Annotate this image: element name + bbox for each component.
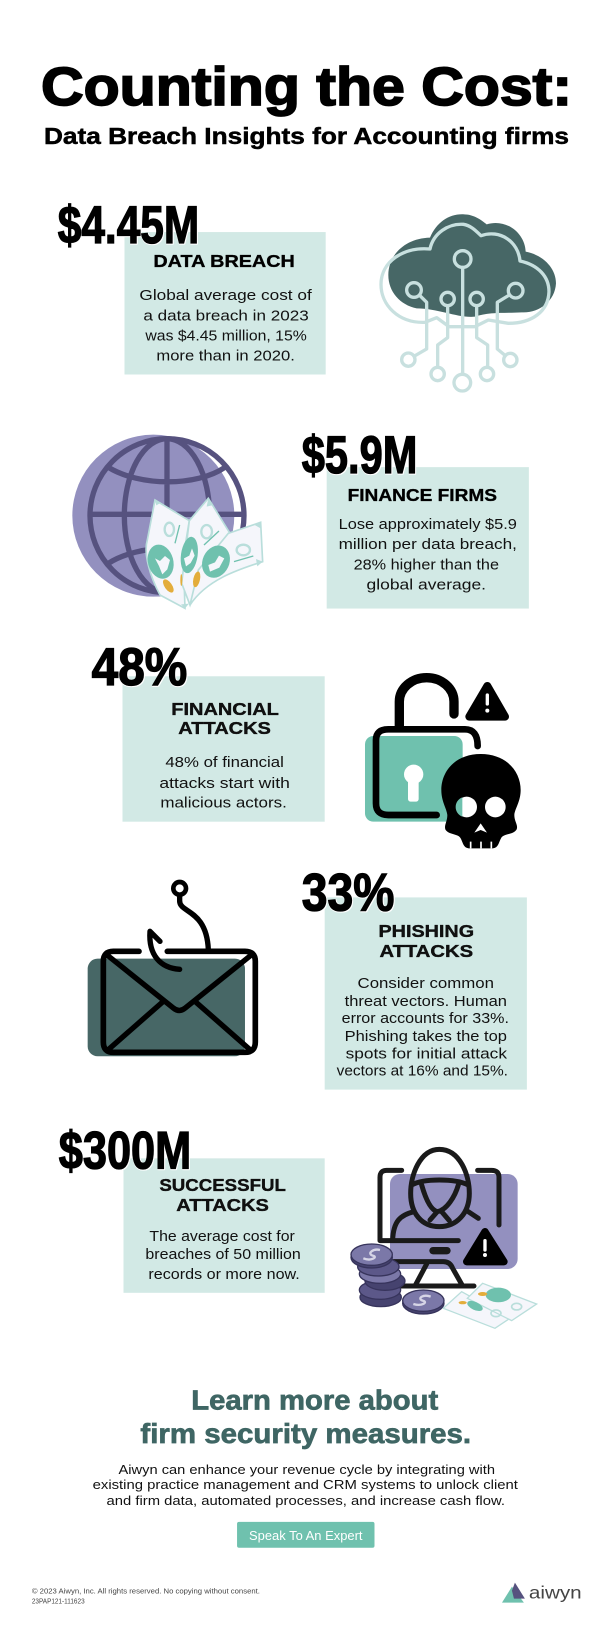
text: data breach: Global average cost of [139,287,313,304]
text: successful attacks: records or more now. [148,1266,300,1283]
panel: successful attacks [59,1121,325,1293]
logo: aiwyn [502,1583,582,1603]
text: successful attacks: The average cost for [149,1228,295,1245]
text: finance firms [339,516,517,594]
text: data breach: a data breach in 2023 [143,308,309,325]
text: phishing attacks: error accounts for 33%. [342,1010,509,1027]
icon: hacker monitor with coins and cash [351,1149,537,1328]
call to action heading [140,1384,471,1449]
text: financial attacks: 48% of financial [165,754,284,771]
text: financial attacks: malicious actors. [160,795,287,812]
call to action text: existing practice management and CRM systems to unlock client [93,1477,518,1492]
text: financial attacks [159,754,290,812]
text: successful attacks [145,1228,301,1283]
text: finance firms: million per data breach, [339,536,517,553]
footer copyright: © 2023 Aiwyn, Inc. All rights reserved. No copying without consent. [32,1588,260,1596]
text: data breach [139,287,313,365]
title: Counting the Cost: [41,57,572,117]
icon: circuit cloud [381,214,556,391]
stat: 33%: 33% [302,863,394,922]
footer copyright [32,1588,260,1606]
text: phishing attacks: vectors at 16% and 15%. [337,1063,508,1080]
subtitle: Data Breach Insights for Accounting firms [44,123,569,149]
text: phishing attacks [337,975,509,1080]
call to action text: and firm data, automated processes, and increase cash flow. [107,1493,505,1508]
panel: data breach [58,196,326,374]
logo: aiwyn: aiwyn [529,1583,582,1603]
text: phishing attacks: spots for initial attack [346,1046,508,1063]
panel: finance firms [302,426,529,609]
stat: $4.45M: $4.45M [58,196,199,255]
text: financial attacks: attacks start with [159,775,290,792]
icon: globe with banknotes [72,435,263,608]
button: speak to an expert: Speak To An Expert [249,1528,363,1543]
icon: phishing envelope [88,882,255,1056]
heading: phishing attacks: PHISHING [378,921,474,941]
panel: financial attacks [92,638,325,822]
text: successful attacks: breaches of 50 million [145,1246,301,1263]
heading: successful attacks [159,1175,286,1215]
heading: financial attacks: ATTACKS [178,718,271,738]
call to action text: Aiwyn can enhance your revenue cycle by integrating with [119,1462,495,1477]
coin stack [351,1244,444,1314]
text: phishing attacks: Phishing takes the top [345,1028,507,1045]
text: data breach: more than in 2020. [156,348,295,365]
text: finance firms: Lose approximately $5.9 [339,516,517,533]
text: finance firms: global average. [367,577,486,594]
heading: phishing attacks: ATTACKS [379,941,473,961]
call to action text [93,1462,518,1508]
heading: phishing attacks [378,921,474,961]
text: phishing attacks: threat vectors. Human [345,993,507,1010]
call to action heading: Learn more about [191,1384,438,1415]
icon: open padlock with warning sign [365,678,505,822]
heading: data breach: DATA BREACH [153,251,295,271]
banknotes [443,1292,510,1328]
heading: financial attacks: FINANCIAL [171,699,279,719]
icon: skull [441,754,521,848]
stat: $5.9M: $5.9M [302,426,417,485]
button: speak to an expert [237,1522,374,1548]
heading: finance firms: FINANCE FIRMS [348,485,497,505]
footer copyright: 23PAP121-111623 [32,1599,85,1606]
text: data breach: was $4.45 million, 15% [144,328,307,345]
heading: successful attacks: ATTACKS [176,1195,269,1215]
panel: phishing attacks [302,863,527,1090]
text: finance firms: 28% higher than the [354,557,499,574]
stat: 48%: 48% [92,638,187,697]
call to action heading: firm security measures. [140,1418,471,1449]
stat: $300M: $300M [59,1121,191,1180]
text: phishing attacks: Consider common [358,975,494,992]
heading: successful attacks: SUCCESSFUL [159,1175,286,1195]
heading: financial attacks [171,699,279,738]
